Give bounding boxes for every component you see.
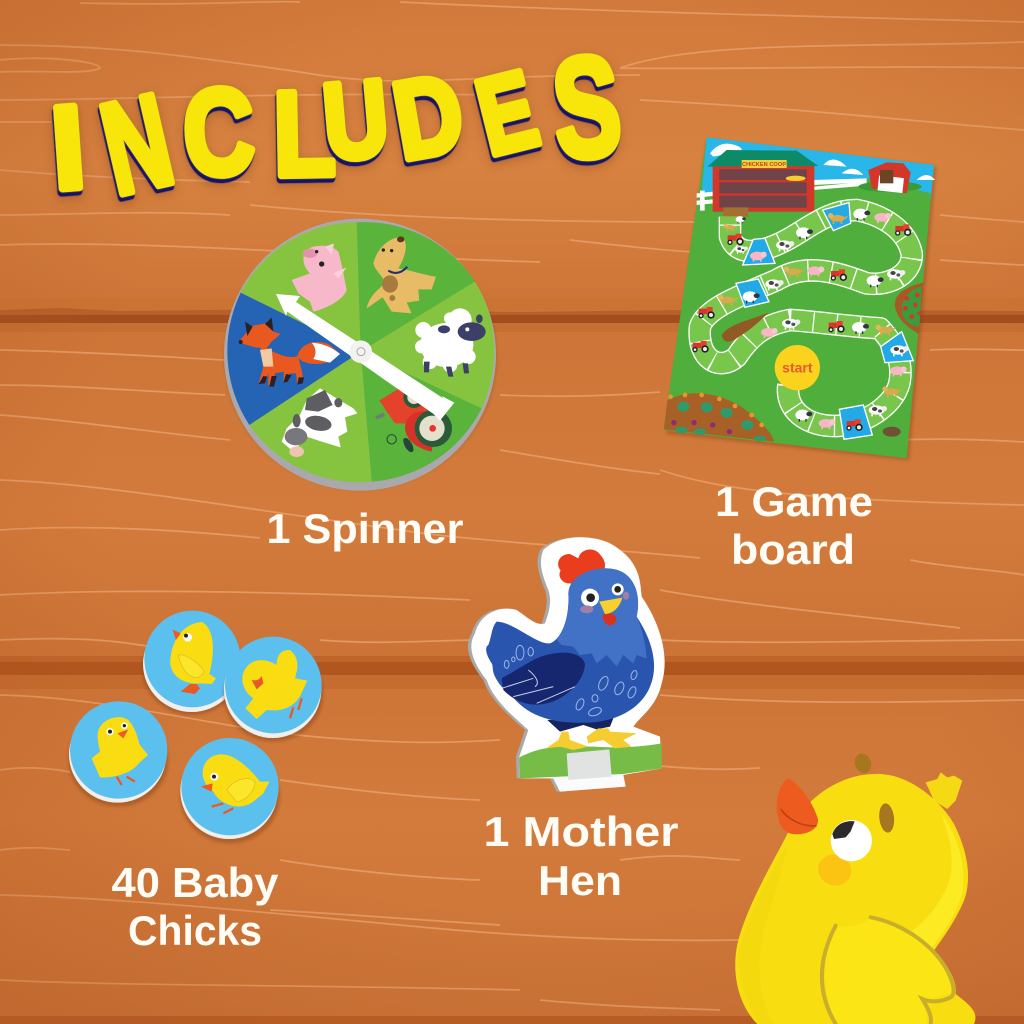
- big chick: [735, 751, 975, 1024]
- label: baby chicks: Chicks: [128, 907, 262, 954]
- label: baby chicks: [112, 859, 279, 954]
- mole hill: [883, 427, 901, 437]
- tile animals: [692, 209, 911, 431]
- disc: facing left: [180, 738, 280, 843]
- hen legs: [547, 717, 614, 732]
- chick beak: [777, 778, 818, 834]
- title: N: [89, 66, 184, 223]
- game board: [663, 137, 937, 461]
- hen standee silhouette: [468, 537, 661, 792]
- label: game board: board: [731, 526, 855, 573]
- spinner hub: [349, 340, 372, 363]
- hen head and shawl: [557, 568, 647, 667]
- pig: [292, 243, 347, 312]
- cow: [282, 388, 357, 457]
- chicken coop: CHICKEN COOP: [742, 162, 786, 168]
- label: game board: 1 Game: [715, 478, 873, 525]
- chick wing: [822, 917, 954, 1024]
- start circle: start: [782, 359, 813, 375]
- label: baby chicks: 40 Baby: [112, 859, 279, 906]
- sky: [700, 137, 934, 210]
- chicken coop: [707, 150, 818, 217]
- spinner sectors: [227, 222, 494, 482]
- title: S: [547, 25, 627, 189]
- disc: looking up: [142, 611, 242, 715]
- disc: facing front: [68, 701, 168, 807]
- label: game board: [715, 478, 873, 573]
- apple bush: [895, 283, 923, 334]
- title: U: [319, 57, 393, 183]
- wing: [502, 653, 585, 705]
- stand: [553, 749, 626, 792]
- chick cheek: [814, 850, 856, 890]
- tractor: [375, 387, 452, 454]
- grass base: [519, 743, 662, 778]
- title: I: [47, 81, 89, 215]
- spinner: [224, 219, 497, 491]
- fox den: [722, 313, 768, 342]
- dog: [367, 236, 436, 313]
- title: E: [466, 48, 548, 179]
- blue tiles: [736, 203, 913, 439]
- chick brow: [878, 803, 895, 833]
- title: L: [272, 67, 336, 202]
- title: [47, 25, 627, 223]
- title: D: [385, 50, 472, 183]
- chick body: [735, 774, 975, 1024]
- mother hen: [468, 537, 665, 792]
- feet: [546, 728, 637, 750]
- comb: [558, 549, 605, 584]
- label: spinner: 1 Spinner: [266, 505, 464, 552]
- hen body: [486, 568, 654, 723]
- chick head tuft: [852, 751, 874, 775]
- barn: [858, 162, 922, 193]
- vegetable garden: [664, 393, 774, 442]
- chick eye: [831, 820, 872, 861]
- title: C: [180, 63, 258, 202]
- spinner pointer: [276, 294, 454, 421]
- disc: happy flying: [223, 637, 323, 742]
- chick discs: [68, 611, 323, 843]
- feather spots: [504, 645, 638, 717]
- fox: [238, 318, 340, 387]
- label: mother hen: 1 Mother: [484, 808, 678, 855]
- label: mother hen: [484, 808, 678, 904]
- board base: [663, 137, 934, 458]
- beak: [580, 592, 629, 625]
- label: mother hen: Hen: [538, 857, 622, 904]
- chick tail feathers: [926, 772, 962, 809]
- sheep: [415, 308, 486, 377]
- start circle: [775, 345, 820, 390]
- eyes: [581, 583, 624, 607]
- track: [700, 210, 912, 426]
